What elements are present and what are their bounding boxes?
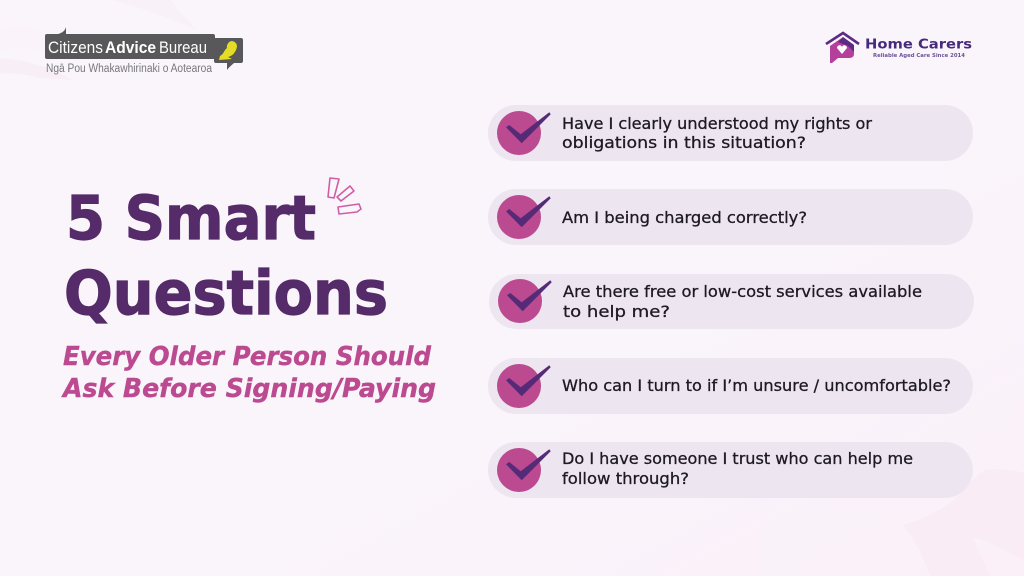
- title: 5 Smart: [66, 183, 316, 254]
- logo: Citizens Advice Bureau: Citizens: [48, 38, 103, 57]
- question 3: [489, 274, 974, 329]
- question 3: to help me?: [563, 302, 670, 321]
- icon: check: [497, 111, 551, 155]
- question 1: [488, 105, 973, 161]
- title: [64, 183, 388, 329]
- icon: check: [497, 195, 551, 239]
- logo: Home Carers: Reliable Aged Care Since 2014: [873, 53, 965, 59]
- decorative wave: bottom right: [903, 469, 1024, 576]
- logo: Citizens Advice Bureau: Ngā Pou Whakawhirinaki o Aotearoa: [46, 63, 213, 75]
- icon: check: [497, 364, 551, 408]
- question 5: [488, 442, 973, 498]
- icon: yellow bird: [219, 41, 237, 60]
- icon: check: [498, 279, 552, 323]
- question 2: Am I being charged correctly?: [562, 208, 807, 227]
- decorative wave: top left: [0, 0, 197, 80]
- logo: Home Carers: Home Carers: [865, 38, 972, 52]
- subtitle: [61, 342, 436, 404]
- question 5: follow through?: [562, 469, 689, 488]
- logo: Citizens Advice Bureau: [45, 27, 243, 75]
- icon: sparkle accent: [328, 178, 361, 214]
- question 4: Who can I turn to if I’m unsure / uncomfortable?: [562, 376, 951, 395]
- subtitle: Ask Before Signing/Paying: [61, 374, 436, 404]
- logo: Home Carers: [826, 33, 972, 63]
- question 1: obligations in this situation?: [562, 133, 806, 152]
- icon: house with heart: [826, 33, 859, 63]
- question 4: [488, 358, 973, 414]
- subtitle: Every Older Person Should: [63, 342, 431, 372]
- logo: Citizens Advice Bureau: Advice: [105, 38, 156, 57]
- question 3: Are there free or low-cost services available: [563, 282, 922, 301]
- question 5: Do I have someone I trust who can help me: [562, 449, 913, 468]
- question 2: [488, 189, 973, 245]
- icon: check: [497, 448, 551, 492]
- logo: Citizens Advice Bureau: Bureau: [159, 38, 207, 57]
- title: Questions: [64, 258, 388, 329]
- question 1: Have I clearly understood my rights or: [562, 114, 872, 133]
